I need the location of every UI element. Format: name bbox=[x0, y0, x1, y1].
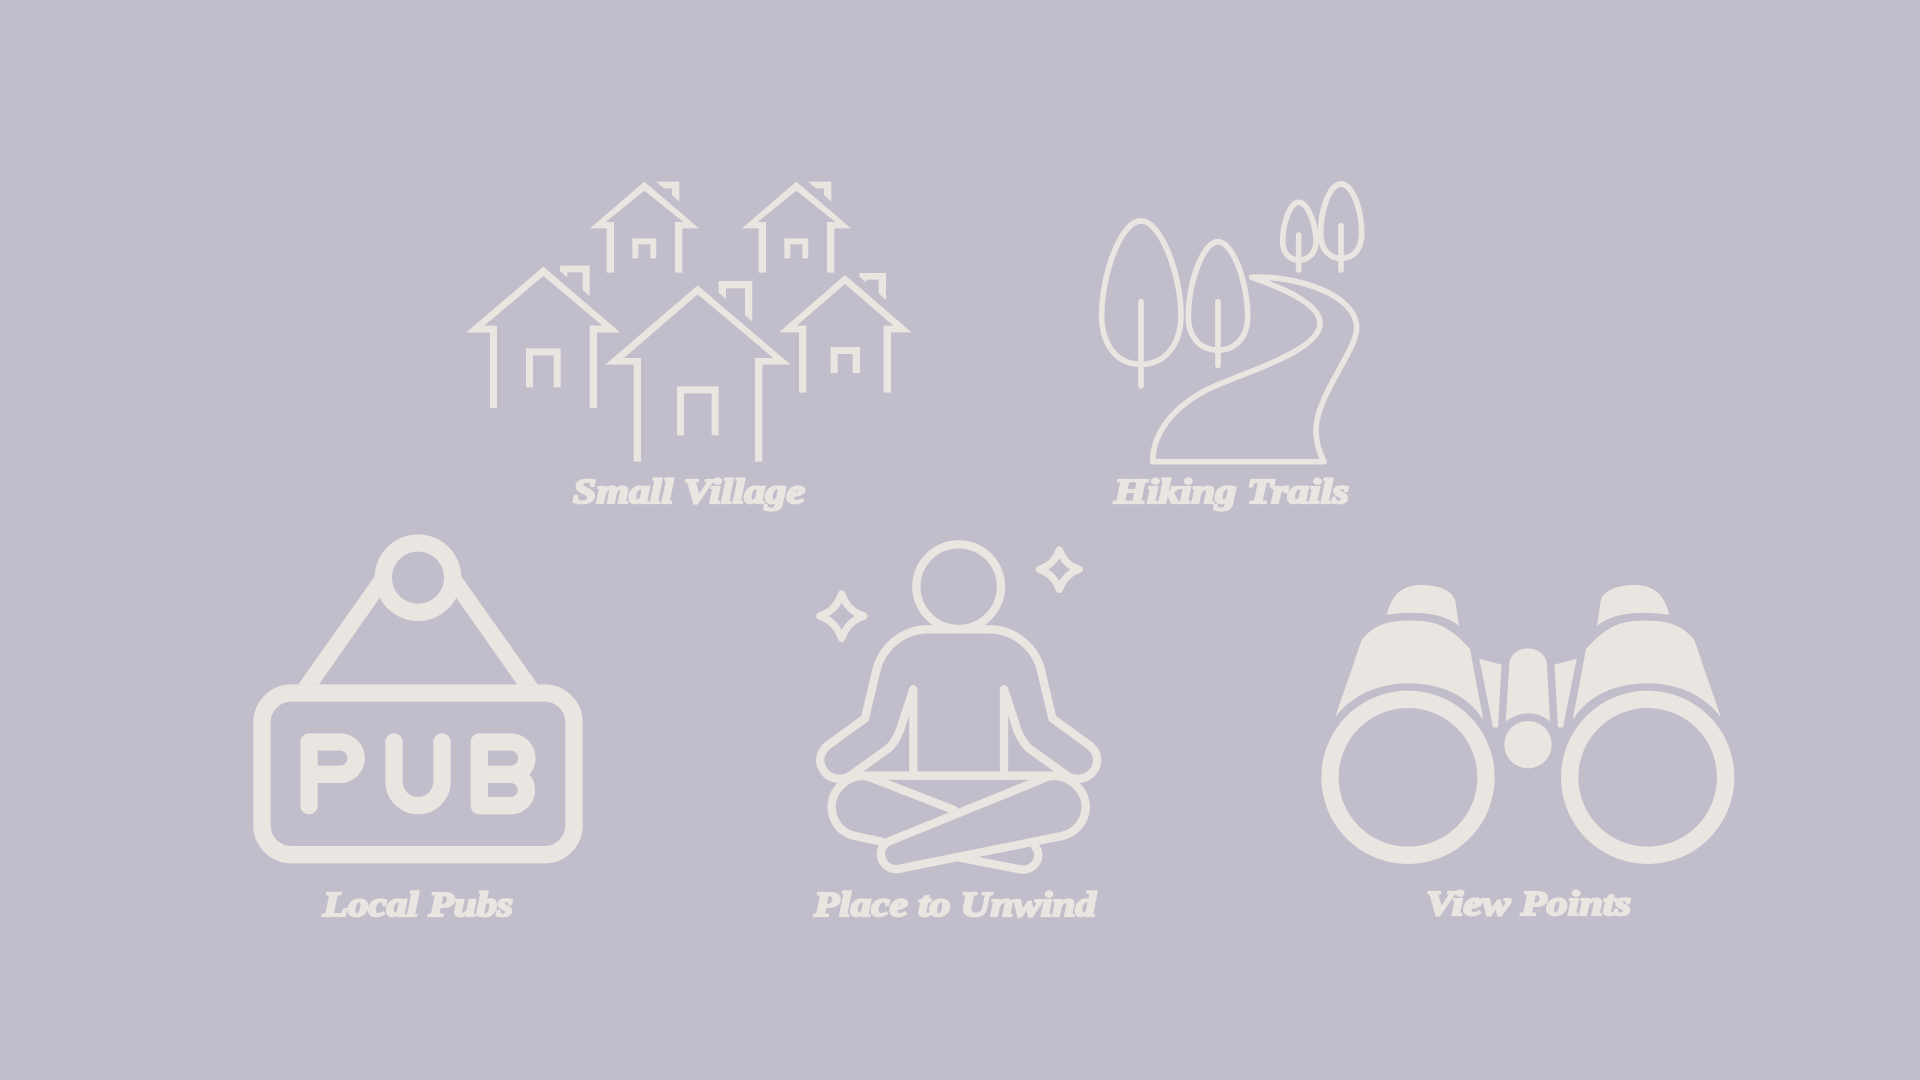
icon: trees and winding trail bbox=[1102, 184, 1362, 462]
icon: houses bbox=[466, 182, 912, 462]
label: small village: Small Village bbox=[573, 472, 805, 511]
panel: small village bbox=[466, 182, 912, 511]
label: place to unwind: Place to Unwind bbox=[813, 885, 1097, 924]
panel: local pubs bbox=[262, 543, 574, 924]
panel: view points bbox=[1330, 585, 1726, 923]
label: view points: View Points bbox=[1426, 884, 1631, 923]
label: local pubs: Local Pubs bbox=[322, 885, 513, 924]
icon: hanging pub sign bbox=[262, 543, 574, 855]
label: hiking trails: Hiking Trails bbox=[1113, 472, 1349, 511]
panel: place to unwind bbox=[813, 544, 1097, 924]
icon: meditating figure with sparkles bbox=[820, 544, 1097, 870]
panel: hiking trails bbox=[1102, 184, 1362, 511]
icon: binoculars bbox=[1330, 585, 1726, 855]
